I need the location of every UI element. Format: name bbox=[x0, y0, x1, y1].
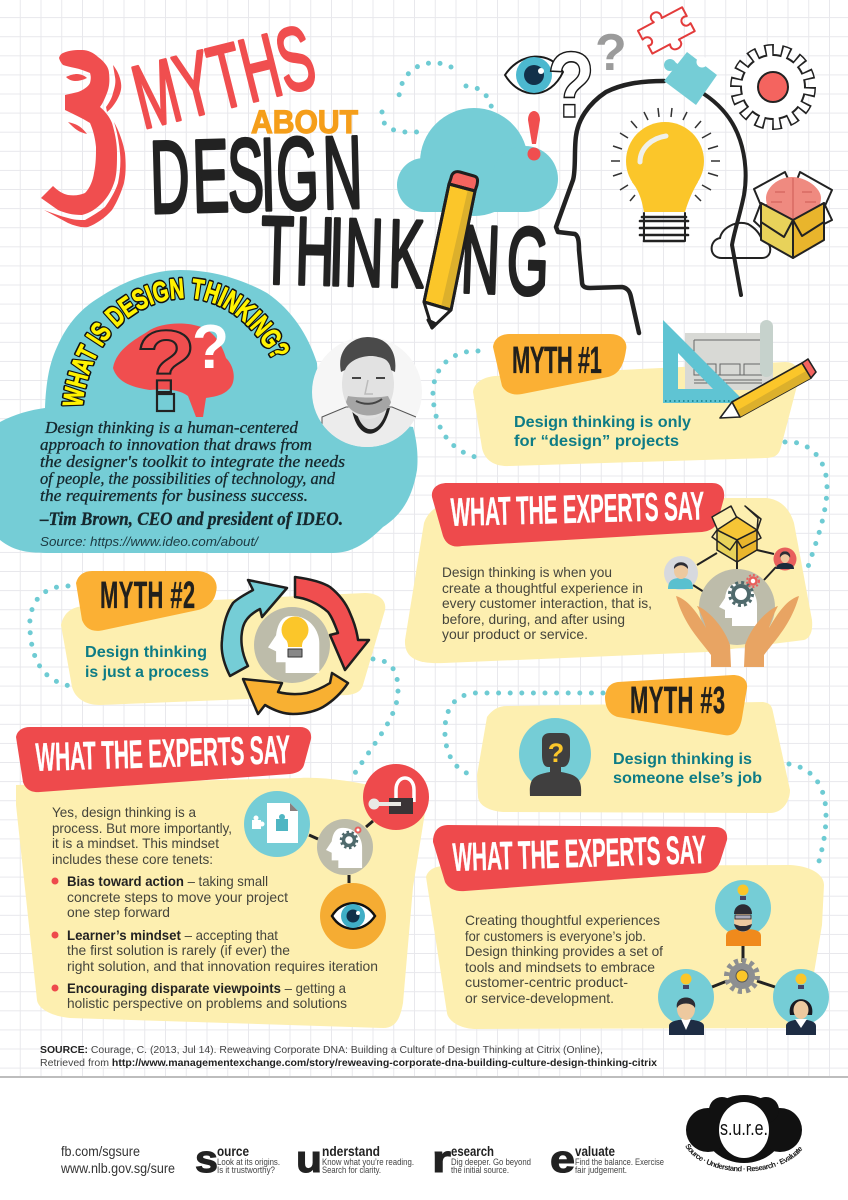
body text: before, during, and after using bbox=[442, 611, 625, 627]
body text: Design thinking is when you bbox=[442, 564, 612, 580]
icon: light bulb bbox=[611, 108, 720, 241]
icon: red outlined puzzle piece bbox=[634, 0, 698, 61]
heading: NG: NG bbox=[459, 207, 551, 316]
quote text bbox=[40, 418, 345, 505]
source link: Source: https://www.ideo.com/about/ bbox=[40, 535, 260, 549]
heading: DESIGN: DESIGN bbox=[149, 115, 364, 235]
quote text: approach to innovation that draws from bbox=[40, 435, 312, 454]
bullet list of core tenets: the first solution is rarely (if ever) the bbox=[67, 942, 290, 958]
banner: Myth #2 bbox=[76, 571, 217, 631]
panel: Myth 1 bbox=[473, 320, 816, 466]
source citation: SOURCE: Courage, C. (2013, Jul 14). Reweaving Corporate DNA: Building a Culture of Design Thinking at Citrix (Online), bbox=[40, 1044, 603, 1056]
footer: Source: Look at its origins. bbox=[217, 1157, 280, 1167]
body text bbox=[465, 912, 663, 1006]
icon: blueprint, ruler and pencil bbox=[663, 320, 816, 418]
quote text: the designer's toolkit to integrate the needs bbox=[40, 452, 345, 471]
footer background bbox=[0, 1077, 848, 1200]
body text: process. But more importantly, bbox=[52, 820, 232, 836]
banner: Myth #1: MYTH #1 bbox=[512, 339, 602, 382]
teal speech cloud bbox=[0, 270, 418, 553]
myth statement: Design thinking bbox=[85, 644, 207, 661]
panel: Experts say 1 bbox=[405, 483, 812, 667]
bullet list of core tenets: holistic perspective on problems and solutions bbox=[67, 995, 347, 1011]
footer: Evaluate: fair judgement. bbox=[575, 1165, 627, 1175]
banner: What the experts say: WHAT THE EXPERTS SAY bbox=[450, 483, 705, 535]
footer: Evaluate bbox=[550, 1139, 664, 1181]
myth statement bbox=[514, 414, 691, 450]
footer: Understand: Search for clarity. bbox=[322, 1165, 381, 1175]
panel: Myth 2 bbox=[61, 571, 385, 714]
logo: s.u.r.e. cloud bbox=[686, 1095, 802, 1172]
banner: Myth #1 bbox=[493, 334, 626, 395]
panel: Experts say 3 bbox=[426, 825, 829, 1035]
banner: What the experts say: WHAT THE EXPERTS SAY bbox=[35, 727, 291, 780]
body text: your product or service. bbox=[442, 626, 588, 642]
footer: Research: esearch bbox=[451, 1143, 494, 1159]
footer: Source: ource bbox=[217, 1143, 249, 1159]
banner: Myth #2: MYTH #2 bbox=[100, 574, 195, 617]
footer links: www.nlb.gov.sg/sure bbox=[60, 1161, 175, 1176]
icon: eye bbox=[505, 57, 563, 93]
body text bbox=[442, 564, 652, 642]
diagram: three people linked by a gear bbox=[658, 880, 829, 1035]
icon: outlined question mark: ? bbox=[547, 32, 595, 137]
heading: What is Design Thinking?: WHAT IS DESIGN THINKING? bbox=[60, 276, 290, 406]
icon: red brain with question marks: ? bbox=[192, 313, 229, 382]
footer links: fb.com/sgsure bbox=[61, 1144, 140, 1159]
icon: silhouette with question mark: ? bbox=[548, 738, 564, 768]
panel: Myth 3 bbox=[477, 675, 790, 813]
bullet list of core tenets: concrete steps to move your project bbox=[67, 889, 288, 905]
myth statement: is just a process bbox=[85, 664, 209, 681]
diagram: mindset network icons bbox=[244, 764, 429, 949]
icon: gear bbox=[736, 50, 810, 124]
heading: ABOUT: ABOUT bbox=[251, 104, 358, 140]
icon: grey question mark: ? bbox=[595, 24, 627, 82]
myth statement bbox=[85, 644, 209, 681]
bullet list of core tenets: Encouraging disparate viewpoints – getting a bbox=[67, 980, 346, 996]
body text: or service-development. bbox=[465, 990, 614, 1006]
footer: Understand: nderstand bbox=[322, 1143, 380, 1159]
panel: What is Design Thinking bbox=[0, 270, 422, 553]
icon: red brain with question marks bbox=[113, 312, 234, 417]
icon: teal puzzle piece bbox=[664, 52, 717, 105]
footer: Evaluate: Find the balance. Exercise bbox=[575, 1157, 664, 1167]
dotted connector lines bbox=[30, 63, 827, 869]
illustration: head held by hands with box and people bbox=[664, 506, 799, 667]
logo: s.u.r.e. cloud: s.u.r.e. bbox=[720, 1118, 768, 1140]
footer: Research bbox=[432, 1139, 531, 1181]
footer: Research: r bbox=[432, 1139, 451, 1181]
myth statement: Design thinking is only bbox=[514, 414, 691, 431]
bullet list of core tenets: Bias toward action – taking small bbox=[67, 873, 268, 889]
numeral 3 bbox=[41, 50, 126, 227]
logo: s.u.r.e. cloud: Source · Understand · Research · Evaluate bbox=[686, 1144, 802, 1172]
illustration: head outline bbox=[556, 81, 746, 333]
footer: Source: Is it trustworthy? bbox=[217, 1165, 275, 1175]
icon: silhouette with question mark bbox=[519, 718, 591, 796]
myth statement: someone else’s job bbox=[613, 770, 762, 787]
icon: brain in a box bbox=[754, 172, 832, 258]
quote text: Design thinking is a human-centered bbox=[44, 418, 299, 437]
bullet list of core tenets: right solution, and that innovation requires iteration bbox=[67, 958, 378, 974]
source citation: Retrieved from http://www.managementexchange.com/story/reweaving-corporate-dna-building-culture-design-thinking-citrix bbox=[40, 1057, 657, 1069]
heading: What is Design Thinking?: WHAT IS DESIGN THINKING? bbox=[62, 278, 289, 406]
title: 3 Myths About Design Thinking bbox=[41, 7, 426, 308]
panel: Experts say 2 bbox=[16, 727, 429, 1028]
body text: create a thoughtful experience in bbox=[442, 580, 643, 596]
footer: Source bbox=[195, 1139, 280, 1181]
banner: What the experts say bbox=[433, 825, 727, 891]
body text: customer-centric product- bbox=[465, 974, 628, 990]
quote text: of people, the possibilities of technology, and bbox=[40, 469, 336, 488]
body text bbox=[52, 804, 232, 867]
banner: Myth #3: MYTH #3 bbox=[630, 679, 725, 722]
body text: tools and mindsets to embrace bbox=[465, 959, 655, 975]
footer: Understand: Know what you’re reading. bbox=[322, 1157, 414, 1167]
bullet list of core tenets bbox=[52, 873, 378, 1011]
quote attribution: –Tim Brown, CEO and president of IDEO. bbox=[39, 509, 343, 530]
banner: What the experts say: WHAT THE EXPERTS SAY bbox=[452, 827, 707, 880]
footer: Evaluate: e bbox=[550, 1139, 575, 1181]
bullet list of core tenets: Learner’s mindset – accepting that bbox=[67, 927, 278, 943]
myth statement: for “design” projects bbox=[514, 433, 679, 450]
myth statement: Design thinking is bbox=[613, 751, 752, 768]
icon: pencil as letter I bbox=[424, 172, 478, 328]
portrait of Tim Brown bbox=[312, 337, 422, 450]
body text: for customers is everyone’s job. bbox=[465, 928, 646, 944]
icon: small cloud outline bbox=[712, 223, 770, 258]
heading: THINK: THINK bbox=[259, 198, 426, 308]
quote text: the requirements for business success. bbox=[40, 486, 308, 505]
source citation bbox=[40, 1044, 657, 1069]
bullet list of core tenets: one step forward bbox=[67, 904, 170, 920]
footer: Research: the initial source. bbox=[451, 1165, 509, 1175]
footer links bbox=[60, 1144, 175, 1176]
icon: exclamation mark bbox=[528, 111, 540, 160]
icon: cycle of arrows around head with bulb bbox=[222, 577, 369, 714]
body text: every customer interaction, that is, bbox=[442, 595, 652, 611]
footer: Understand: u bbox=[296, 1139, 322, 1181]
footer divider bbox=[0, 1076, 848, 1078]
body text: Creating thoughtful experiences bbox=[465, 912, 660, 928]
footer: Evaluate: valuate bbox=[575, 1143, 615, 1159]
body text: Design thinking provides a set of bbox=[465, 943, 663, 959]
footer: Understand bbox=[296, 1139, 414, 1181]
myth statement bbox=[613, 751, 762, 787]
body text: it is a mindset. This mindset bbox=[52, 835, 219, 851]
body text: includes these core tenets: bbox=[52, 851, 213, 867]
icon: red brain with question marks: ? bbox=[136, 312, 196, 411]
footer: Source: s bbox=[195, 1139, 218, 1181]
banner: Myth #3 bbox=[605, 675, 747, 735]
illustration: teal cloud bbox=[397, 108, 558, 216]
footer: Research: Dig deeper. Go beyond bbox=[451, 1157, 531, 1167]
body text: Yes, design thinking is a bbox=[52, 804, 196, 820]
